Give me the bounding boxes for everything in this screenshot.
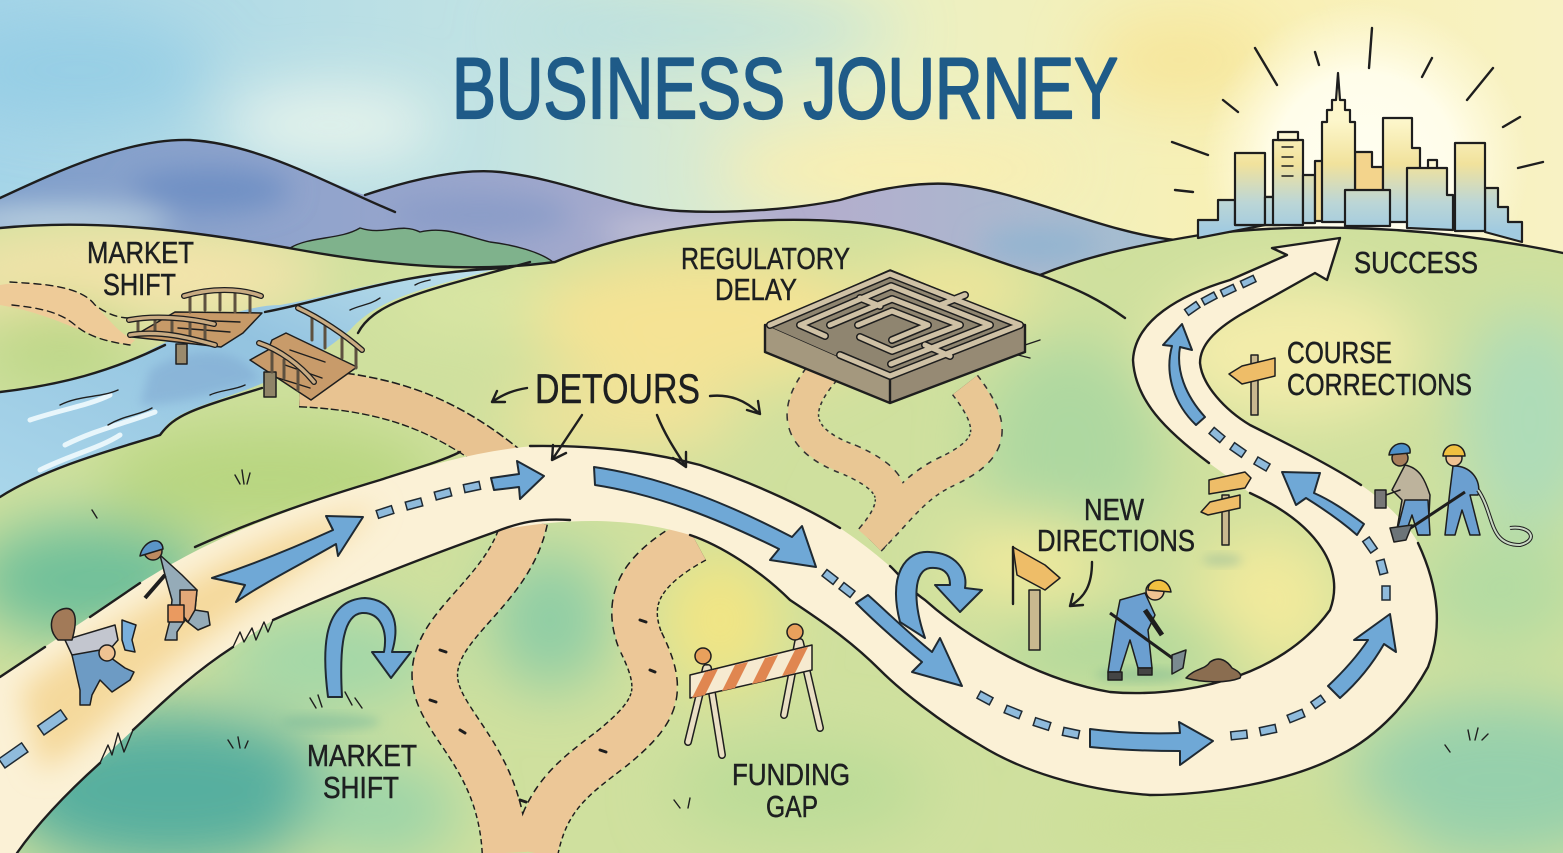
label: market shift (top): MARKET <box>87 235 194 270</box>
u-turn arrow: market shift <box>280 598 411 730</box>
label: new directions with arrow: DIRECTIONS <box>1037 523 1195 558</box>
maze: regulatory delay <box>765 270 1040 403</box>
label: detours with arrows: DETOURS <box>535 365 700 412</box>
workers: road crew <box>1375 443 1531 545</box>
label: success: SUCCESS <box>1354 245 1478 280</box>
arrow: first stretch <box>212 516 363 602</box>
label: funding gap: FUNDING <box>732 757 850 792</box>
label: course corrections: CORRECTIONS <box>1287 367 1472 402</box>
traveller: standing man <box>140 541 210 640</box>
broken bridge: left span <box>129 290 262 364</box>
travellers on road <box>51 541 210 705</box>
title: BUSINESS JOURNEY <box>452 41 1118 137</box>
dirt path: maze loop <box>803 370 986 540</box>
label: market shift (top): SHIFT <box>103 267 176 302</box>
arrow: before detours <box>491 461 544 499</box>
grass tufts <box>92 470 1488 808</box>
arrow: turning up <box>1328 614 1396 698</box>
arrow: long curve <box>594 467 816 567</box>
label: course corrections: COURSE <box>1287 335 1392 370</box>
hills and meadows <box>0 220 1563 853</box>
road centre dashes <box>0 275 1390 768</box>
barricade: funding gap <box>688 624 820 755</box>
arrow: final curve <box>1163 324 1205 425</box>
label: new directions with arrow <box>1037 492 1195 606</box>
signpost: left arrow sign <box>1013 547 1060 650</box>
label: funding gap: GAP <box>766 789 818 824</box>
worker: digging <box>1095 580 1186 682</box>
arrow: u-turn on road <box>896 552 982 638</box>
river <box>0 262 530 497</box>
dirt path: bridge to road <box>300 388 515 470</box>
signpost: new directions fork <box>1201 472 1251 566</box>
label: new directions with arrow: NEW <box>1084 492 1145 527</box>
label: market shift (bottom): MARKET <box>307 738 417 773</box>
label: regulatory delay: DELAY <box>715 272 797 307</box>
traveller: crouching woman <box>51 609 136 705</box>
label: regulatory delay: REGULATORY <box>681 241 850 276</box>
label: market shift (bottom): SHIFT <box>323 770 399 805</box>
mountains <box>0 140 1175 300</box>
sun rays <box>1172 28 1543 192</box>
main road <box>0 238 1437 853</box>
sky background <box>0 0 1563 330</box>
arrow: return <box>1282 472 1364 535</box>
broken bridge: right span <box>250 308 362 400</box>
road arrows <box>212 324 1396 765</box>
arrow: downhill <box>856 595 962 686</box>
label: detours with arrows <box>492 365 760 467</box>
far bank path <box>0 282 135 345</box>
city skyline <box>1198 73 1522 242</box>
dirt pile <box>1186 659 1241 682</box>
dirt paths: road to lower junction <box>430 520 695 853</box>
dirt paths <box>300 370 986 853</box>
signpost: course corrections <box>1229 355 1275 415</box>
arrow: bottom curve <box>1090 722 1213 765</box>
